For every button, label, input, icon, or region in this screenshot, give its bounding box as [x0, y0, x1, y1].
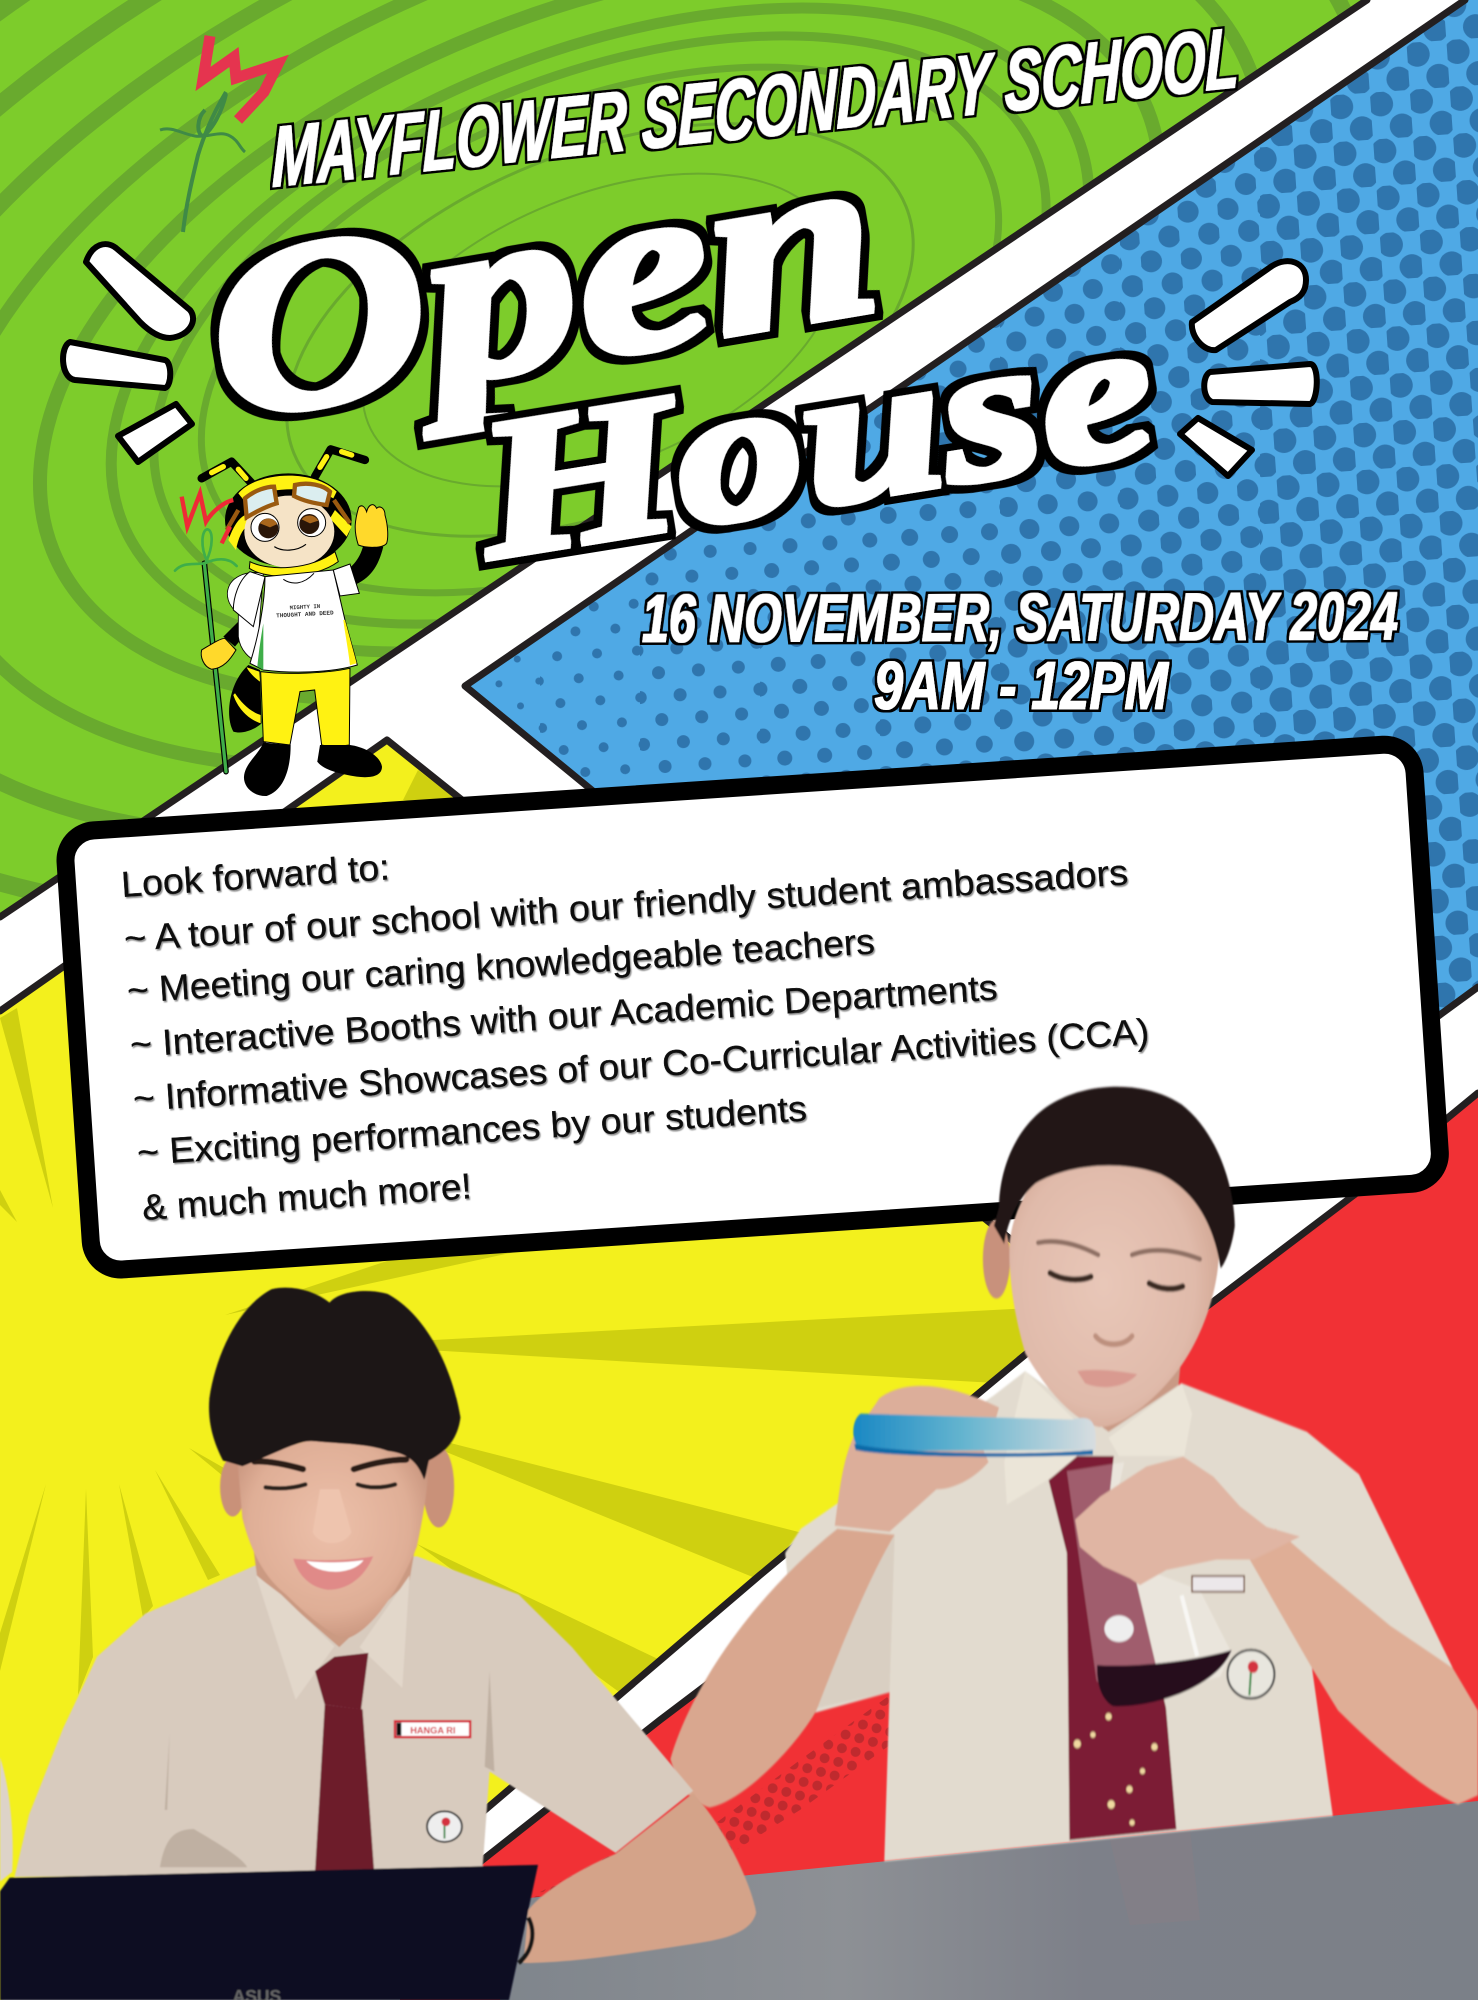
- bee red flower: [182, 493, 233, 543]
- table tie reflection: [1110, 1830, 1200, 1925]
- girl eyes: [1050, 1273, 1183, 1289]
- boy name tag: HANGA RI: [410, 1725, 455, 1735]
- box text list: ~ Interactive Booths with our Academic Departments: [129, 966, 999, 1065]
- boy crest: [427, 1811, 462, 1842]
- box text list: ~ Informative Showcases of our Co-Curricular Activities (CCA): [132, 1011, 1150, 1119]
- boy far-left sliver: [0, 1757, 13, 1882]
- girl crest: [1228, 1650, 1274, 1698]
- bee eyes: [251, 509, 326, 550]
- bee fist glove: [201, 638, 236, 669]
- panel: yellow burst background: [0, 744, 1026, 2000]
- red halftone strip: [525, 1695, 890, 1915]
- boy forearm: [519, 1793, 756, 1963]
- boy face: [238, 1432, 429, 1639]
- girl collar: [1004, 1371, 1192, 1504]
- heading: House: House: [459, 276, 1168, 601]
- girl nose: [1096, 1336, 1132, 1344]
- girl sleeve shade: [806, 1535, 895, 1711]
- boy eyebrows: [254, 1460, 406, 1469]
- panel: green swirl background: [0, 0, 1361, 913]
- panel: text box: [64, 743, 1442, 1271]
- girl pouring hand: [835, 1386, 999, 1532]
- laptop: [0, 1865, 538, 2000]
- boy neck: [252, 1537, 417, 1647]
- icon: left burst marks: [63, 244, 193, 462]
- panel: red background: [400, 1093, 1478, 2000]
- boy nose: [313, 1489, 351, 1543]
- girl ear: [983, 1220, 1010, 1298]
- girl neck: [1036, 1353, 1182, 1438]
- bee wings: [227, 572, 263, 660]
- box text list: [120, 846, 1150, 1228]
- photo: girl student: [670, 1087, 1478, 1861]
- box text list: ~ A tour of our school with our friendly student ambassadors: [123, 851, 1129, 959]
- icon: school logo: [160, 36, 278, 232]
- mascot: bee: [175, 449, 388, 796]
- icon: right burst marks: [1180, 261, 1317, 476]
- boy ears: [220, 1446, 454, 1528]
- girl face: [1009, 1141, 1219, 1427]
- bee tail: [229, 665, 262, 733]
- bee raised glove: [355, 505, 388, 547]
- tie sparkles: [1074, 1713, 1158, 1826]
- boy name tag: [395, 1721, 470, 1737]
- box text list: & much much more!: [141, 1165, 473, 1228]
- panel: blue halftone background: [470, 0, 1478, 1011]
- bee shirt slogan second line: THOUGHT AND DEED: [276, 609, 334, 619]
- girl flask hand: [1075, 1457, 1300, 1585]
- girl hair: [994, 1087, 1235, 1268]
- girl left arm: [670, 1529, 895, 1808]
- box text list: ~ Exciting performances by our students: [136, 1088, 808, 1173]
- box frame: [64, 743, 1442, 1271]
- bee pants: [261, 668, 350, 746]
- boy eyes: [266, 1484, 395, 1488]
- boy hair: [209, 1288, 460, 1480]
- bee arms: [223, 545, 383, 647]
- bee staff: [175, 529, 237, 772]
- bee shirt: [233, 564, 359, 672]
- girl mouth: [1077, 1370, 1137, 1387]
- time text: 9AM - 12PM: [874, 648, 1169, 724]
- girl name tag: [1192, 1576, 1244, 1592]
- test tube: [853, 1414, 1096, 1457]
- bee shoes: [244, 743, 382, 796]
- bee goggles: [227, 484, 350, 530]
- table: [500, 1801, 1478, 2000]
- girl tie: [1049, 1456, 1176, 1840]
- boy mouth: [293, 1556, 373, 1590]
- box text list: Look forward to:: [120, 846, 391, 905]
- conical flask: [1067, 1462, 1232, 1706]
- bee shirt slogan: MIGHTY IN: [289, 603, 321, 611]
- boy shirt shading: [160, 1671, 494, 1867]
- bee head: [225, 473, 352, 576]
- boy tie: [315, 1653, 374, 1872]
- girl right arm: [1249, 1529, 1478, 1804]
- box text list: ~ Meeting our caring knowledgeable teachers: [126, 920, 876, 1011]
- bee antennae: [202, 449, 365, 485]
- boy collar: [256, 1575, 410, 1700]
- boy shirt: [15, 1556, 693, 1877]
- girl eyebrows: [1038, 1242, 1200, 1259]
- heading: Open: Open: [188, 97, 895, 471]
- girl shirt: [785, 1371, 1453, 1861]
- photo: boy student: [0, 1288, 756, 2000]
